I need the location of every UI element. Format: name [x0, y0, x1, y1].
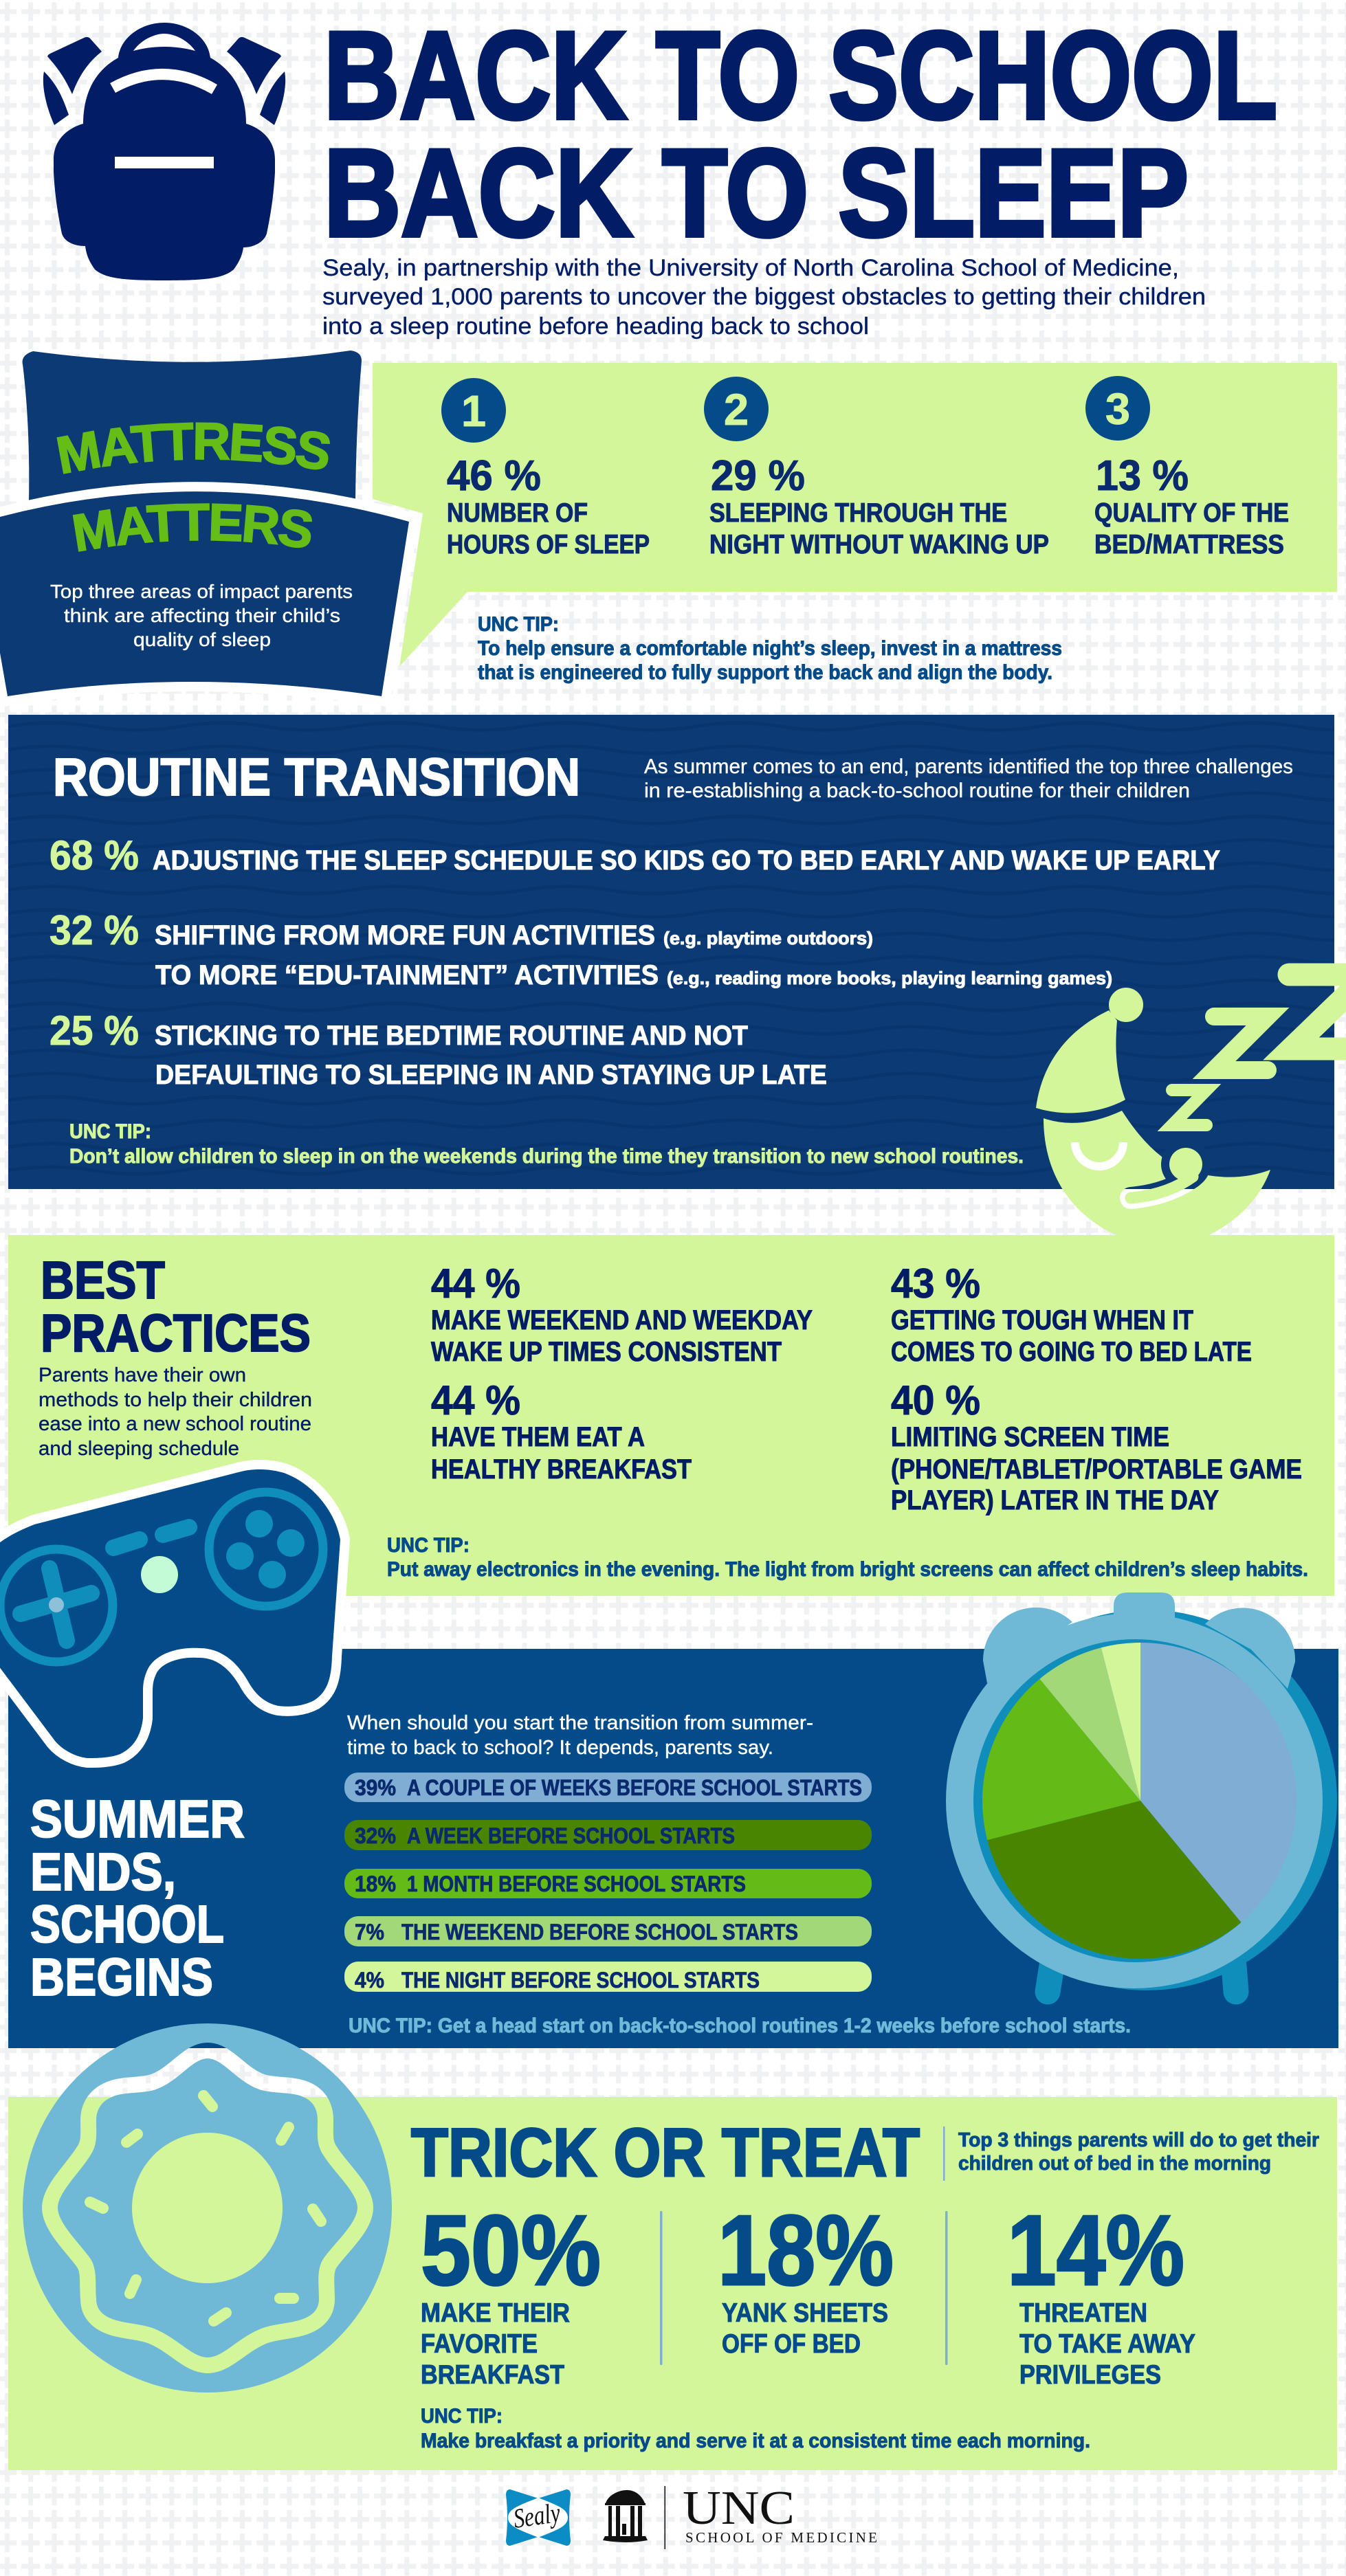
heading: ENDS, — [30, 1843, 176, 1902]
panel: mattress stats speech bubble — [373, 363, 1337, 684]
stat 40: PLAYER) LATER IN THE DAY — [891, 1485, 1219, 1515]
heading: BEST — [41, 1251, 165, 1310]
bar 39 — [344, 1773, 872, 1802]
bar 32: 32% — [355, 1823, 396, 1848]
stat 14: TO TAKE AWAY — [1019, 2329, 1195, 2359]
word: mattress: MATTRESS — [56, 422, 330, 474]
pie chart — [982, 1643, 1299, 1959]
logo: UNC column icon — [603, 2490, 648, 2542]
UNC tip: Don’t allow children to sleep in on the weekends during the time they transition to new school routines. — [69, 1145, 1024, 1168]
item 32: (e.g. playtime outdoors) — [663, 928, 873, 948]
item 25: STICKING TO THE BEDTIME ROUTINE AND NOT — [155, 1021, 748, 1051]
intro: When should you start the transition from summer- — [347, 1712, 813, 1734]
item 32: 32 % — [49, 907, 139, 953]
left pad — [0, 1549, 113, 1662]
heading — [30, 1790, 245, 2007]
heading: TRICK OR TREAT — [411, 2114, 920, 2190]
stat 44 weekend: MAKE WEEKEND AND WEEKDAY — [431, 1305, 813, 1335]
stat 40: (PHONE/TABLET/PORTABLE GAME — [891, 1454, 1302, 1485]
big z — [1289, 975, 1346, 1049]
stat 43: COMES TO GOING TO BED LATE — [891, 1337, 1252, 1367]
description — [38, 1364, 312, 1460]
logo: UNC School of Medicine: SCHOOL OF MEDICINE — [685, 2529, 877, 2546]
stat 40 — [891, 1377, 1302, 1515]
stat 44 breakfast — [431, 1377, 692, 1485]
UNC tip — [478, 613, 1062, 684]
intro text — [322, 255, 1206, 340]
stat 50: BREAKFAST — [421, 2360, 564, 2390]
heading: SUMMER — [30, 1790, 245, 1849]
UNC tip: Put away electronics in the evening. The light from bright screens can affect children’s sleep habits. — [387, 1558, 1308, 1581]
UNC tip: UNC TIP: — [478, 613, 559, 636]
bar 7: THE WEEKEND BEFORE SCHOOL STARTS — [401, 1920, 798, 1944]
panel: summer ends, school begins — [8, 1649, 1338, 2048]
clock frame — [946, 1592, 1323, 1988]
description: and sleeping schedule — [38, 1438, 239, 1460]
word: matters: MATTERS — [73, 503, 312, 552]
UNC tip: UNC TIP: — [387, 1534, 470, 1557]
bar 18: 18% — [355, 1872, 396, 1896]
logo: UNC School of Medicine: UNC — [683, 2482, 795, 2535]
small z — [1172, 1090, 1206, 1125]
logo: Sealy: Sealy — [511, 2497, 562, 2534]
stat 3 — [1085, 376, 1289, 559]
heading: SCHOOL — [30, 1895, 224, 1954]
bar 39: 39% — [355, 1775, 396, 1800]
intro: As summer comes to an end, parents identified the top three challenges — [644, 755, 1293, 778]
pillow description — [50, 581, 353, 650]
UNC tip — [69, 1120, 1024, 1168]
stat 18: OFF OF BED — [722, 2329, 861, 2359]
pillow description: think are affecting their child’s — [64, 605, 340, 626]
UNC tip: UNC TIP: — [421, 2405, 503, 2428]
description: ease into a new school routine — [38, 1413, 311, 1435]
stat 40: LIMITING SCREEN TIME — [891, 1422, 1169, 1452]
stat 43 — [891, 1261, 1252, 1367]
description: methods to help their children — [38, 1389, 312, 1411]
bar 32 — [344, 1820, 872, 1850]
heading: ROUTINE TRANSITION — [53, 748, 580, 807]
stat 3: 3 — [1105, 384, 1130, 434]
bar 7: 7% — [355, 1920, 384, 1944]
UNC tip: UNC TIP: Get a head start on back-to-school routines 1-2 weeks before school starts. — [349, 2014, 1131, 2037]
intro — [644, 755, 1293, 802]
item 32: TO MORE “EDU-TAINMENT” ACTIVITIES — [155, 960, 659, 990]
intro: time to back to school? It depends, parents say. — [347, 1737, 773, 1759]
pillow description: quality of sleep — [133, 629, 271, 650]
intro text: Sealy, in partnership with the University of North Carolina School of Medicine, — [322, 255, 1179, 281]
stat 14: PRIVILEGES — [1019, 2360, 1161, 2390]
stat 1: 1 — [461, 386, 486, 436]
stat 18 — [718, 2195, 894, 2359]
stat 3: 13 % — [1096, 452, 1189, 500]
stat 2: NIGHT WITHOUT WAKING UP — [709, 530, 1049, 559]
bar 39: A COUPLE OF WEEKS BEFORE SCHOOL STARTS — [407, 1775, 862, 1800]
stat 44 weekend — [431, 1261, 813, 1367]
sprinkles — [90, 2096, 321, 2321]
icon: game controller — [0, 1469, 340, 1758]
stat 2 — [704, 377, 1049, 559]
stat 43: GETTING TOUGH WHEN IT — [891, 1305, 1193, 1335]
stat 44 breakfast: HAVE THEM EAT A — [431, 1422, 645, 1452]
stat 40: 40 % — [891, 1377, 980, 1423]
stat 18: YANK SHEETS — [722, 2298, 888, 2328]
select buttons — [113, 1527, 189, 1548]
panel: best practices — [8, 1235, 1334, 1596]
bar 18 — [344, 1869, 872, 1898]
logo: UNC School of Medicine — [664, 2482, 877, 2549]
UNC tip: UNC TIP: — [69, 1120, 151, 1143]
stat 18: 18% — [718, 2195, 894, 2306]
intro text: into a sleep routine before heading back to school — [322, 313, 869, 340]
stat 44 breakfast: HEALTHY BREAKFAST — [431, 1454, 692, 1485]
centre light — [141, 1556, 178, 1593]
bar 4: THE NIGHT BEFORE SCHOOL STARTS — [401, 1968, 760, 1992]
stat 50: MAKE THEIR — [421, 2298, 570, 2328]
stat 43: 43 % — [891, 1261, 980, 1307]
pillow heading: mattress matters — [0, 351, 417, 707]
stat 1: HOURS OF SLEEP — [447, 530, 650, 559]
stat 50: FAVORITE — [421, 2329, 538, 2359]
item 32: SHIFTING FROM MORE FUN ACTIVITIES — [155, 920, 655, 951]
stat 14: THREATEN — [1019, 2298, 1147, 2328]
UNC tip — [387, 1534, 1308, 1581]
stat 1 — [441, 378, 650, 559]
stat 50: 50% — [421, 2195, 601, 2306]
stat 14 — [1007, 2195, 1195, 2390]
heading: PRACTICES — [41, 1304, 311, 1363]
item 32 — [49, 907, 1112, 990]
subheading — [958, 2129, 1319, 2175]
intro — [347, 1712, 813, 1759]
medium z — [1214, 1017, 1268, 1070]
item 25 — [49, 1008, 827, 1090]
title: BACK TO SLEEP — [324, 124, 1189, 263]
bar 4: 4% — [355, 1968, 384, 1992]
pillow description: Top three areas of impact parents — [50, 581, 353, 602]
subheading: children out of bed in the morning — [958, 2153, 1271, 2175]
stat 14: 14% — [1007, 2195, 1184, 2306]
stat 2: 29 % — [711, 452, 805, 500]
UNC tip: Make breakfast a priority and serve it at a consistent time each morning. — [421, 2430, 1090, 2452]
intro: in re-establishing a back-to-school routine for their children — [644, 779, 1190, 802]
item 68: 68 % — [49, 832, 139, 878]
icon: backpack — [43, 23, 285, 280]
UNC tip: that is engineered to fully support the back and align the body. — [478, 661, 1052, 684]
intro text: surveyed 1,000 parents to uncover the biggest obstacles to getting their children — [322, 284, 1206, 310]
stat 3: QUALITY OF THE — [1094, 498, 1289, 528]
UNC tip — [421, 2405, 1090, 2452]
panel: routine transition — [8, 715, 1334, 1189]
description: Parents have their own — [38, 1364, 246, 1386]
logo: Sealy — [506, 2489, 571, 2546]
item 68: ADJUSTING THE SLEEP SCHEDULE SO KIDS GO TO BED EARLY AND WAKE UP EARLY — [153, 845, 1220, 876]
panel: trick or treat — [8, 2097, 1337, 2470]
stat 2: 2 — [724, 385, 749, 434]
stat 44 weekend: 44 % — [431, 1261, 520, 1307]
UNC tip: To help ensure a comfortable night’s sleep, invest in a mattress — [478, 637, 1062, 660]
item 32: (e.g., reading more books, playing learning games) — [667, 968, 1112, 988]
bar 32: A WEEK BEFORE SCHOOL STARTS — [407, 1823, 735, 1848]
heading — [41, 1251, 311, 1363]
item 25: DEFAULTING TO SLEEPING IN AND STAYING UP LATE — [155, 1060, 827, 1090]
bar 18: 1 MONTH BEFORE SCHOOL STARTS — [407, 1872, 746, 1896]
stat 2: SLEEPING THROUGH THE — [709, 498, 1007, 528]
icon: donut — [23, 2023, 392, 2392]
stat 3: BED/MATTRESS — [1094, 530, 1284, 559]
stat 1: NUMBER OF — [447, 498, 588, 528]
bar 4 — [344, 1962, 872, 1992]
icon: sleeping moon with nightcap — [1036, 975, 1346, 1237]
stat 44 breakfast: 44 % — [431, 1377, 520, 1423]
subheading: Top 3 things parents will do to get their — [958, 2129, 1319, 2151]
item 68 — [49, 832, 1220, 878]
item 25: 25 % — [49, 1008, 139, 1054]
icon: alarm clock pie chart — [946, 1592, 1337, 1992]
heading: BEGINS — [30, 1948, 213, 2007]
stat 44 weekend: WAKE UP TIMES CONSISTENT — [431, 1337, 782, 1367]
stat 50 — [421, 2195, 601, 2390]
right pad — [209, 1492, 323, 1606]
stat 1: 46 % — [447, 452, 541, 500]
title — [324, 6, 1277, 263]
